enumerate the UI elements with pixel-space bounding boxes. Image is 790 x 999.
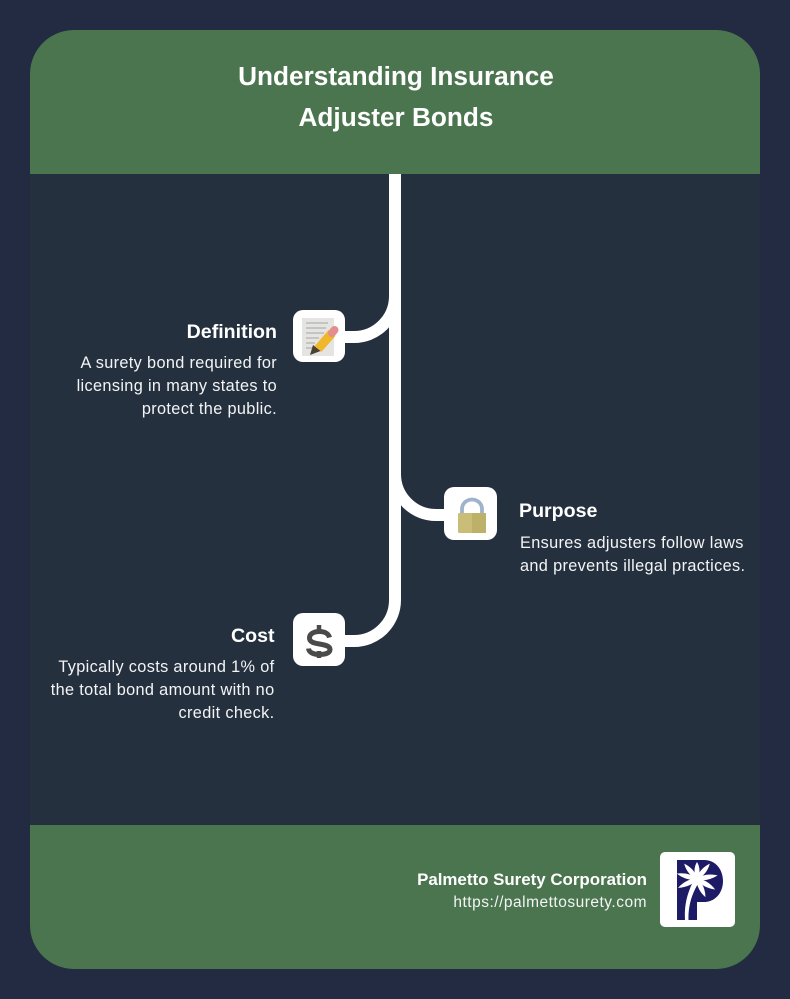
description: Cost: credit check.: [179, 704, 274, 722]
description: Definition: A surety bond required for: [81, 354, 277, 372]
icon: padlock: [444, 487, 497, 540]
description: Purpose: [520, 534, 745, 575]
panel: header band: [30, 30, 760, 174]
text block: Definition: [77, 321, 277, 418]
text block: Cost: [51, 625, 274, 722]
footer company text: [417, 870, 647, 911]
heading: Purpose: Purpose: [519, 500, 597, 522]
description: Cost: [51, 658, 274, 722]
title: Adjuster Bonds: [299, 102, 493, 132]
description: Purpose: and prevents illegal practices.: [520, 557, 745, 575]
title: Understanding Insurance: [238, 61, 554, 91]
description: Definition: [77, 354, 277, 418]
description: Cost: Typically costs around 1% of: [58, 658, 274, 676]
description: Purpose: Ensures adjusters follow laws: [520, 534, 744, 552]
panel: footer band: [30, 825, 760, 969]
description: Definition: protect the public.: [142, 400, 277, 418]
icon: dollar sign: [293, 613, 345, 666]
company url: https://palmettosurety.com: [453, 894, 647, 911]
description: Definition: licensing in many states to: [77, 377, 277, 395]
heading: Cost: Cost: [231, 625, 274, 647]
company name: Palmetto Surety Corporation: [417, 870, 647, 889]
description: Cost: the total bond amount with no: [51, 681, 274, 699]
icon: memo with pencil: [293, 310, 345, 362]
logo: Palmetto Surety: [660, 852, 735, 927]
text block: Purpose: [519, 500, 745, 575]
heading: Definition: Definition: [187, 321, 277, 343]
title: [238, 61, 554, 132]
